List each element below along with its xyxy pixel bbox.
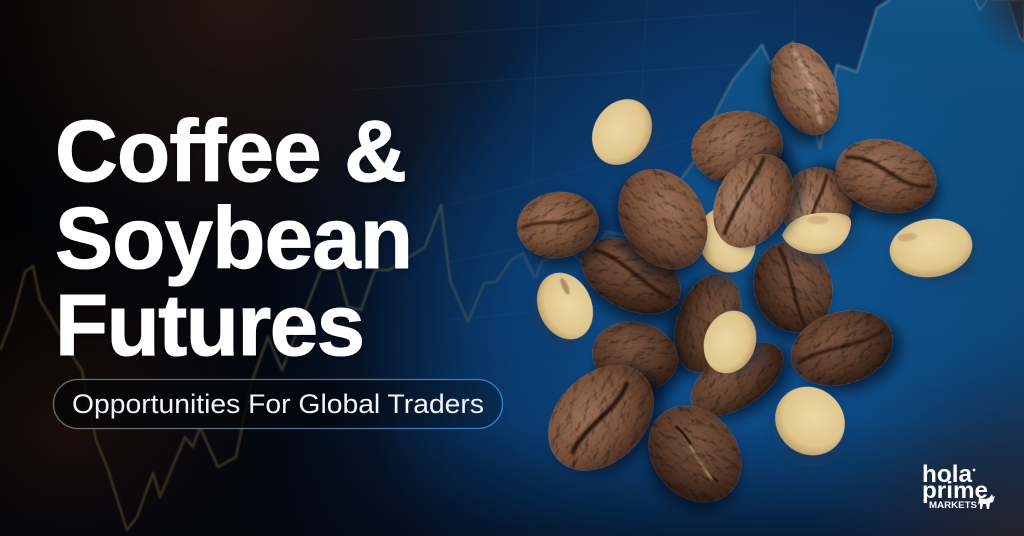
coffee bean tall centre	[663, 265, 753, 381]
soybean behind cluster	[689, 199, 765, 281]
soybean top	[580, 88, 664, 176]
coffee bean far left	[513, 187, 603, 263]
logo: hola prime markets	[922, 461, 995, 510]
coffee bean bottom left	[527, 344, 675, 492]
coffee bean behind right	[770, 157, 862, 251]
coffee bean large round	[600, 152, 726, 286]
chart grid	[350, 0, 795, 320]
logo: hola prime markets: MARKETS	[929, 500, 977, 510]
soybean bottom	[761, 373, 859, 469]
coffee bean round lower	[586, 314, 684, 398]
peanut fragment	[782, 213, 851, 254]
coffee bean upper centre	[686, 105, 788, 189]
soybean left	[527, 264, 603, 348]
coffee and soybean cluster	[513, 33, 976, 521]
coffee bean top	[758, 33, 852, 145]
title: Soybean	[55, 190, 413, 287]
coffee bean right lower	[782, 298, 902, 398]
coffee bean lower centre	[678, 327, 796, 431]
chart top right segment	[993, 0, 1024, 42]
title: Coffee &	[55, 103, 407, 200]
coffee bean mid left	[569, 223, 693, 329]
title	[55, 103, 413, 374]
subtitle text: Opportunities For Global Traders	[72, 389, 484, 419]
chart area fill	[610, 0, 1024, 486]
coffee bean centre right lower	[742, 231, 844, 343]
logo: hola prime markets: prime	[922, 477, 988, 503]
coffee bean bottom	[629, 387, 761, 521]
coffee bean right	[828, 129, 944, 223]
logo: hola prime markets: hola	[922, 461, 973, 488]
coffee bean front centre	[697, 140, 809, 262]
subtitle pill	[54, 380, 502, 428]
title: Futures	[55, 277, 365, 374]
soybean right	[886, 214, 976, 282]
icon: bull	[978, 494, 995, 509]
soybean centre lower	[695, 303, 765, 381]
